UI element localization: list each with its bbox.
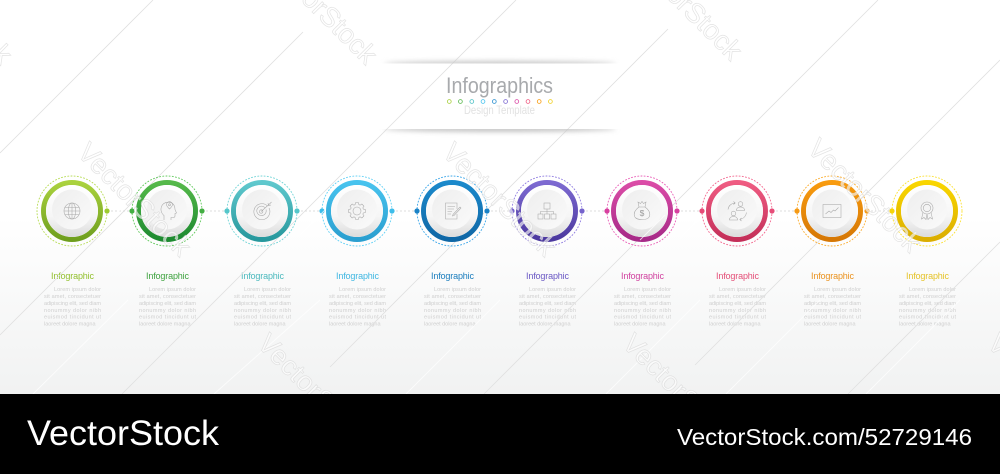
text block: step 6: nonummy dolor nibh — [519, 308, 576, 314]
text block: step 8: laoreet dolore magna — [709, 322, 761, 328]
text block: step 8: nonummy dolor nibh — [709, 308, 766, 314]
text block: step 3: sit amet, consectetuer — [234, 294, 291, 300]
text block: step 4: Lorem ipsum dolor — [339, 287, 386, 293]
timeline connectors — [107, 210, 892, 212]
text block: step 7: adipiscing elit, sed diam — [614, 301, 671, 307]
text block: step 5: Lorem ipsum dolor — [434, 287, 481, 293]
text block: step 1: Lorem ipsum dolor — [54, 287, 101, 293]
step 5 circle — [414, 176, 490, 246]
icon: organisation chart — [538, 203, 556, 219]
text block: step 9: laoreet dolore magna — [804, 322, 856, 328]
step 1 circle — [37, 176, 110, 246]
text block: step 5 — [424, 271, 481, 328]
text block: step 4: nonummy dolor nibh — [329, 308, 386, 314]
text block: step 3: euismod tincidunt ut — [234, 314, 291, 320]
text block: step 7: sit amet, consectetuer — [614, 294, 671, 300]
step 7 circle — [604, 176, 680, 246]
text block: step 2: adipiscing elit, sed diam — [139, 301, 196, 307]
text block: step 5: sit amet, consectetuer — [424, 294, 481, 300]
step 3 circle — [224, 176, 300, 246]
icon: globe — [64, 203, 80, 219]
text block: step 5: euismod tincidunt ut — [424, 314, 481, 320]
text block: step 9: adipiscing elit, sed diam — [804, 301, 861, 307]
text block: step 2: Lorem ipsum dolor — [149, 287, 196, 293]
text block: step 6: sit amet, consectetuer — [519, 294, 576, 300]
text block: step 9: euismod tincidunt ut — [804, 314, 861, 320]
text block: step 5: Infographic — [431, 271, 474, 281]
text block: step 6: laoreet dolore magna — [519, 322, 571, 328]
step 6 circle — [509, 176, 585, 246]
colour dots row — [447, 100, 552, 103]
watermark text: VectorStock — [252, 327, 378, 453]
text block: step 1: sit amet, consectetuer — [44, 294, 101, 300]
watermark text: VectorStock — [72, 136, 198, 262]
text block: step 7: Infographic — [621, 271, 664, 281]
text block: step 1: laoreet dolore magna — [44, 322, 96, 328]
text block: step 5: adipiscing elit, sed diam — [424, 301, 481, 307]
text block: step 4: euismod tincidunt ut — [329, 314, 386, 320]
text block: step 7: Lorem ipsum dolor — [624, 287, 671, 293]
text block: step 10: sit amet, consectetuer — [899, 294, 956, 300]
icon: target with arrow — [254, 202, 272, 220]
text block: step 3: adipiscing elit, sed diam — [234, 301, 291, 307]
icon: money bag: $ — [640, 208, 645, 218]
footer bar — [0, 394, 1000, 474]
text block: step 3: Lorem ipsum dolor — [244, 287, 291, 293]
step descriptions text layer — [44, 271, 956, 328]
text block: step 10 — [899, 271, 956, 328]
text block: step 9: sit amet, consectetuer — [804, 294, 861, 300]
text block: step 9: Infographic — [811, 271, 854, 281]
text block: step 2 — [139, 271, 196, 328]
watermark text: VectorStock — [617, 327, 743, 453]
text block: step 2: sit amet, consectetuer — [139, 294, 196, 300]
step 4 circle — [319, 176, 395, 246]
text block: step 4: laoreet dolore magna — [329, 322, 381, 328]
text block: step 8: Infographic — [716, 271, 760, 281]
text block: step 2: nonummy dolor nibh — [139, 308, 196, 314]
text block: step 10: nonummy dolor nibh — [899, 308, 956, 314]
icon: head with location pin — [161, 202, 176, 220]
text block: step 4 — [329, 271, 386, 328]
icon: document with pencil — [446, 203, 461, 219]
text block: step 7 — [614, 271, 671, 328]
text block: step 5: nonummy dolor nibh — [424, 308, 481, 314]
footer image id: VectorStock.com/52729146 — [677, 424, 972, 450]
text block: step 7: nonummy dolor nibh — [614, 308, 671, 314]
watermark text: VectorStock — [802, 132, 928, 258]
text block: step 8: Lorem ipsum dolor — [719, 287, 766, 293]
subheading: Design Template — [464, 103, 535, 117]
text block: step 5: laoreet dolore magna — [424, 322, 476, 328]
text block: step 2: laoreet dolore magna — [139, 322, 191, 328]
step 8 circle — [699, 176, 775, 246]
text block: step 1 — [44, 271, 101, 328]
text block: step 6 — [519, 271, 576, 328]
step 10 circle — [889, 176, 962, 246]
icon: people exchange cycle — [728, 202, 746, 221]
icon: award badge — [921, 202, 933, 220]
text block: step 6: euismod tincidunt ut — [519, 314, 576, 320]
text block: step 8 — [709, 271, 766, 328]
watermark text: VectorStock — [437, 136, 563, 262]
text block: step 3: laoreet dolore magna — [234, 322, 286, 328]
icon: line chart in frame — [823, 204, 841, 218]
title panel — [384, 61, 616, 132]
text block: step 4: Infographic — [336, 271, 380, 281]
step 9 circle — [794, 176, 870, 246]
text block: step 8: euismod tincidunt ut — [709, 314, 766, 320]
text block: step 7: euismod tincidunt ut — [614, 314, 671, 320]
text block: step 1: euismod tincidunt ut — [44, 314, 101, 320]
text block: step 6: adipiscing elit, sed diam — [519, 301, 576, 307]
text block: step 8: adipiscing elit, sed diam — [709, 301, 766, 307]
text block: step 10: Lorem ipsum dolor — [909, 287, 956, 293]
text block: step 6: Infographic — [526, 271, 570, 281]
step 2 circle — [129, 176, 205, 246]
text block: step 4: adipiscing elit, sed diam — [329, 301, 386, 307]
text block: step 10: euismod tincidunt ut — [899, 314, 956, 320]
text block: step 2: euismod tincidunt ut — [139, 314, 196, 320]
text block: step 2: Infographic — [146, 271, 190, 281]
text block: step 9: Lorem ipsum dolor — [814, 287, 861, 293]
heading: Infographics — [446, 73, 553, 98]
text block: step 3: Infographic — [241, 271, 284, 281]
text block: step 3 — [234, 271, 291, 328]
text block: step 10: laoreet dolore magna — [899, 322, 951, 328]
text block: step 6: Lorem ipsum dolor — [529, 287, 576, 293]
text block: step 9 — [804, 271, 861, 328]
text block: step 1: nonummy dolor nibh — [44, 308, 101, 314]
footer logo: VectorStock — [27, 414, 220, 453]
text block: step 8: sit amet, consectetuer — [709, 294, 766, 300]
text block: step 1: Infographic — [51, 271, 94, 281]
text block: step 7: laoreet dolore magna — [614, 322, 666, 328]
text block: step 10: adipiscing elit, sed diam — [899, 301, 956, 307]
text block: step 1: adipiscing elit, sed diam — [44, 301, 101, 307]
icon: gear — [349, 203, 365, 219]
text block: step 3: nonummy dolor nibh — [234, 308, 291, 314]
text block: step 9: nonummy dolor nibh — [804, 308, 861, 314]
text block: step 10: Infographic — [906, 271, 950, 281]
text block: step 4: sit amet, consectetuer — [329, 294, 386, 300]
